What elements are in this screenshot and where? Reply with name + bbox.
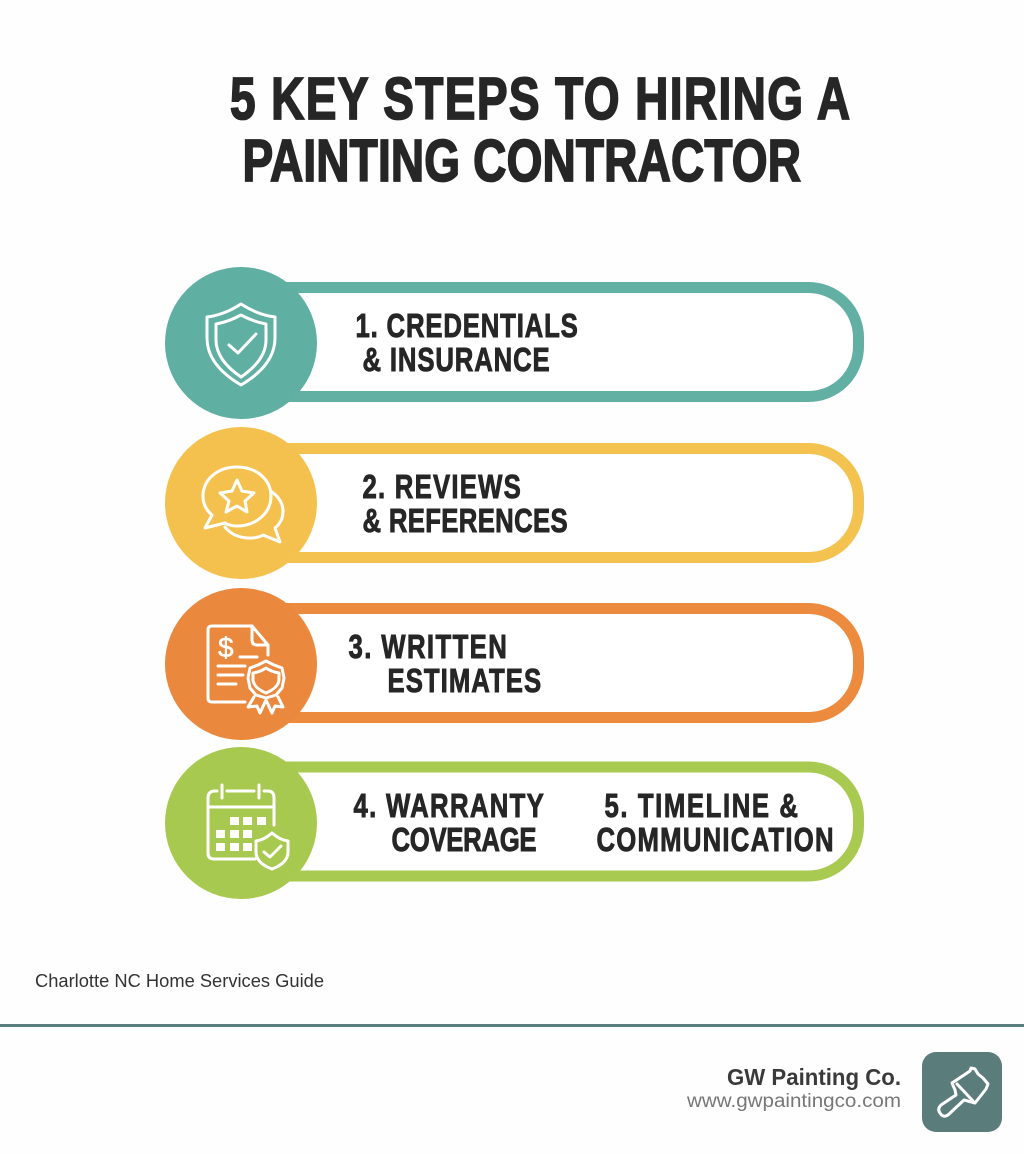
step 1 label: 1. CREDENTIALS — [356, 308, 578, 345]
title: 5 KEY STEPS TO HIRING A — [230, 67, 850, 133]
step 5 label: 5. TIMELINE & — [604, 788, 798, 825]
step 5 label: COMMUNICATION — [596, 822, 834, 859]
icon: speech bubbles with star — [203, 467, 283, 542]
dollar sign: $ — [218, 632, 234, 663]
icon: shield with check — [207, 304, 275, 385]
step 3 label: ESTIMATES — [388, 663, 541, 700]
logo: paintbrush — [922, 1052, 1002, 1132]
step 2 label: & REFERENCES — [362, 503, 568, 540]
step 3 label: 3. WRITTEN — [348, 629, 507, 666]
step 3 label — [348, 629, 541, 700]
brand name: GW Painting Co. — [727, 1064, 901, 1090]
title: PAINTING CONTRACTOR — [242, 129, 801, 195]
step 4 label: 4. WARRANTY — [354, 788, 544, 825]
step 4 label: COVERAGE — [392, 822, 537, 859]
step 1 label — [356, 308, 578, 379]
step 1: credentials and insurance — [165, 267, 858, 419]
step 2 label: 2. REVIEWS — [362, 469, 521, 506]
step 3: written estimates — [165, 588, 858, 740]
brand website: www.gwpaintingco.com — [686, 1091, 901, 1112]
step 5 label — [596, 788, 834, 859]
footer divider — [0, 1024, 1024, 1027]
icon: estimate document with badge — [208, 626, 284, 713]
guide caption: Charlotte NC Home Services Guide — [35, 971, 324, 991]
step 1 label: & INSURANCE — [362, 342, 550, 379]
step 2: reviews and references — [165, 427, 858, 579]
icon: calendar with shield — [208, 785, 288, 869]
step 4: warranty and timeline — [165, 747, 858, 899]
step 2 label — [362, 469, 568, 540]
step 4 label — [354, 788, 544, 859]
title — [230, 67, 850, 195]
